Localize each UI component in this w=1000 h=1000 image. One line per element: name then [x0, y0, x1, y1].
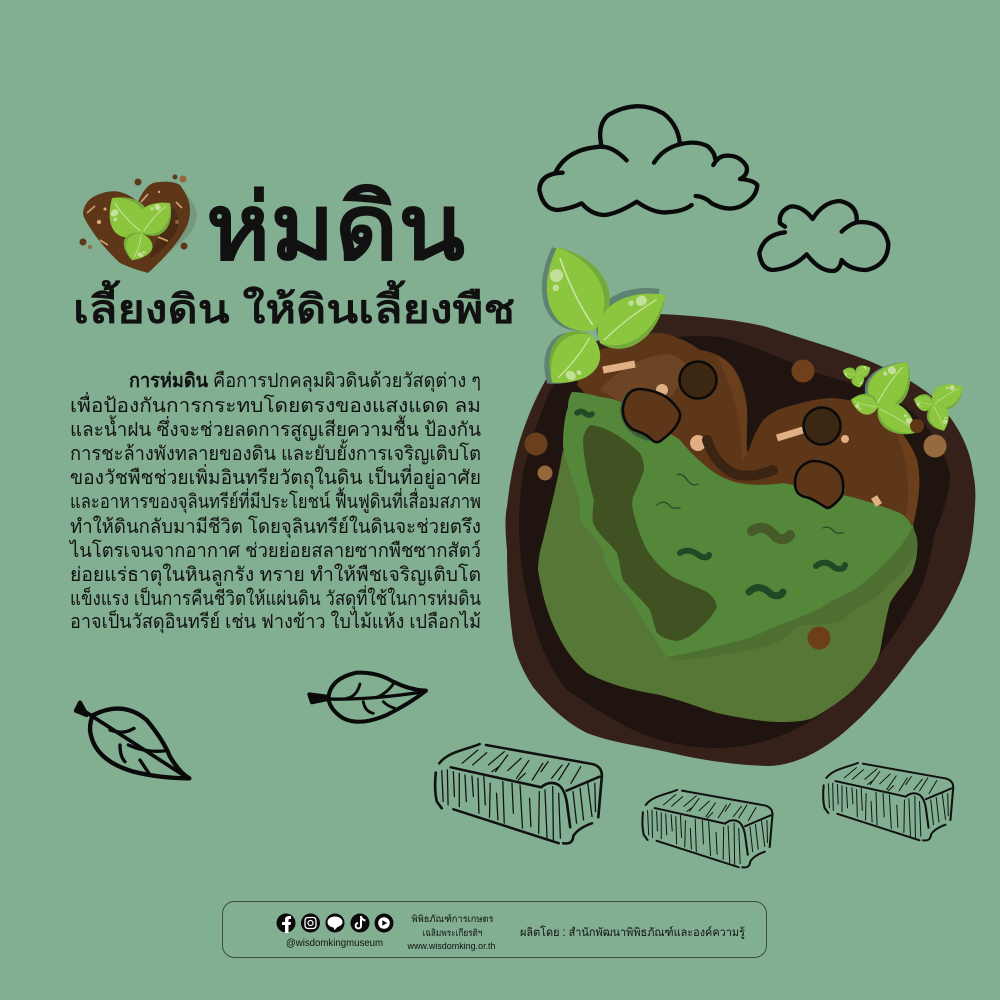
- body text block: การชะล้างพังทลายของดิน และยับยั้งการเจริญเติบโต: [70, 439, 481, 465]
- body text block: [68, 370, 481, 634]
- body text block: เพื่อป้องกันการกระทบโดยตรงของแสงแดด ลม: [70, 392, 481, 417]
- footer panel: [222, 902, 766, 958]
- icon: leaf outline left: [76, 703, 189, 778]
- title: ห่มดิน: [206, 177, 465, 279]
- icon: tiktok: [350, 914, 370, 932]
- root: [707, 440, 773, 476]
- outlined dark circles: [680, 362, 840, 444]
- dark green patch: [583, 425, 717, 641]
- body text block: อาจเป็นวัสดุอินทรีย์ เช่น ฟางข้าว ใบไม้แห้ง เปลือกไม้: [70, 609, 481, 634]
- inner dark hollow: [519, 336, 950, 748]
- thin squiggles: [657, 474, 843, 533]
- soil mound illustration: [506, 235, 975, 766]
- icon: large cloud outline: [539, 106, 757, 215]
- producer credit: ผลิตโดย : สำนักพัฒนาพิพิธภัณฑ์และองค์ความรู้: [520, 925, 745, 939]
- body text block: ของวัชพืชช่วยเพิ่มอินทรียวัตถุในดิน เป็นที่อยู่อาศัย: [70, 464, 481, 490]
- body text block: แข็งแรง เป็นการคืนชีวิตให้แผ่นดิน วัสดุที่ใช้ในการห่มดิน: [70, 585, 481, 611]
- green soil layer: [563, 392, 912, 657]
- large sprout: [524, 235, 679, 399]
- brown soil layer: [577, 333, 919, 560]
- subtitle: เลี้ยงดิน ให้ดินเลี้ยงพืช: [73, 280, 515, 332]
- body text block: การห่มดิน คือการปกคลุมผิวดินด้วยวัสดุต่าง ๆ: [129, 370, 481, 393]
- body text block: และอาหารของจุลินทรีย์ที่มีประโยชน์ ฟื้นฟูดินที่เสื่อมสภาพ: [70, 487, 481, 514]
- icon: youtube: [374, 914, 394, 932]
- peach pebbles: [656, 384, 849, 451]
- lower olive soil layer: [538, 450, 917, 722]
- icon: facebook: [276, 914, 296, 933]
- museum name and website: พิพิธภัณฑ์การเกษตร: [412, 913, 494, 925]
- body text block: ย่อยแร่ธาตุในหินลูกรัง ทราย ทำให้พืชเจริญเติบโต: [70, 563, 481, 587]
- museum name and website: เฉลิมพระเกียรติฯ: [422, 927, 482, 939]
- icon: hay bale middle: [642, 790, 772, 867]
- social handle: @wisdomkingmuseum: [286, 938, 383, 949]
- outlined clod 1: [620, 389, 680, 442]
- body text block: และน้ำฝน ซึ่งจะช่วยลดการสูญเสียความชื้น ป้องกัน: [70, 415, 481, 442]
- outlined clod 2: [795, 461, 846, 509]
- band shadow: [667, 527, 917, 661]
- worms: [577, 411, 845, 596]
- icon: line: [326, 914, 344, 932]
- small sprout cluster centre: [848, 351, 924, 444]
- tiny sprout right: [911, 376, 969, 435]
- body text block: ทำให้ดินกลับมามีชีวิต โดยจุลินทรีย์ในดินจะช่วยตรึง: [70, 515, 481, 539]
- body text block: ไนโตรเจนจากอากาศ ช่วยย่อยสลายซากพืชซากสัตว์: [68, 539, 481, 562]
- museum name and website: [407, 913, 496, 952]
- icon: small cloud outline: [759, 201, 888, 271]
- outer dark rim: [506, 314, 975, 766]
- museum name and website: www.wisdomking.or.th: [407, 941, 496, 952]
- brown pebbles: [524, 360, 946, 650]
- icon: hay bale right: [823, 763, 953, 840]
- icon: leaf outline right: [309, 673, 426, 722]
- straw pieces: [603, 364, 879, 505]
- tiny sprout left: [841, 362, 873, 389]
- icon: hay bale large: [435, 744, 602, 843]
- icon: instagram: [301, 914, 320, 932]
- icon: soil heart with sprout: [80, 174, 197, 273]
